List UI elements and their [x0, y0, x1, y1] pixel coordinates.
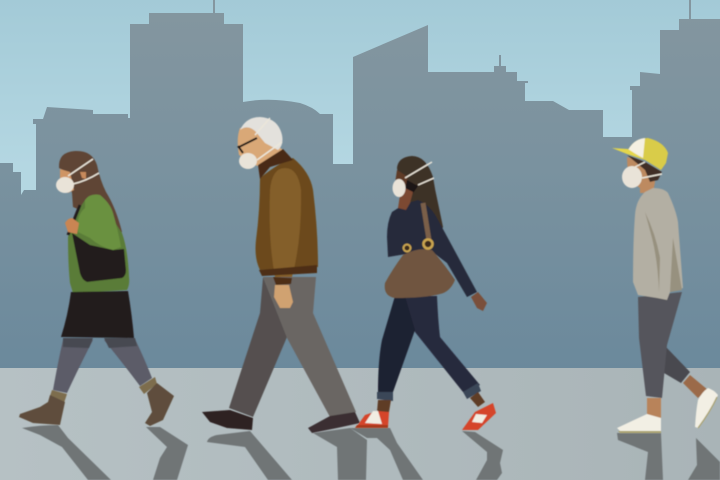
- cuffs: [377, 392, 393, 401]
- person 1: woman in green jacket: [19, 151, 174, 426]
- back leg: [229, 277, 287, 417]
- phone: [405, 180, 418, 196]
- hair: [627, 155, 662, 182]
- shadows on pavement: [22, 425, 720, 480]
- front leg: [647, 398, 661, 418]
- collar: [258, 149, 293, 179]
- mask: [392, 179, 406, 197]
- sweater: [633, 188, 683, 300]
- back leg: [378, 296, 415, 392]
- raised hand: [398, 188, 413, 210]
- ankles: [377, 400, 391, 412]
- hand: [65, 218, 79, 234]
- neck and face: [627, 157, 655, 193]
- sleeve: [78, 195, 121, 250]
- face: [60, 169, 74, 193]
- front shoe: [617, 414, 661, 431]
- front leg: [263, 277, 356, 417]
- bag: [72, 233, 126, 282]
- hair and headscarf: [59, 151, 122, 245]
- handbag: [385, 249, 455, 298]
- back leg: [683, 375, 708, 398]
- hem and cuff: [259, 265, 317, 276]
- face: [394, 170, 408, 198]
- front leg: [397, 296, 480, 392]
- green jacket: [68, 200, 129, 293]
- mask: [622, 166, 642, 188]
- white hair: [240, 117, 282, 150]
- hand: [471, 292, 487, 311]
- glasses: [238, 138, 257, 153]
- boots: [49, 390, 67, 403]
- city skyline: [0, 0, 720, 370]
- legs: [53, 340, 93, 393]
- person 2: older man in brown jacket: [202, 117, 360, 433]
- hand: [274, 285, 293, 308]
- hair: [397, 156, 443, 250]
- back arm and top: [387, 200, 477, 297]
- sky: [0, 0, 720, 370]
- mask: [56, 177, 74, 193]
- back shoe: [695, 388, 718, 428]
- shoes: [202, 410, 253, 430]
- skirt: [61, 291, 134, 338]
- shoes: [357, 411, 389, 427]
- person 4: man in yellow cap: [612, 138, 718, 433]
- sleeve: [270, 168, 301, 277]
- yellow cap: [628, 138, 668, 170]
- pavement: [0, 368, 720, 480]
- face and neck: [238, 127, 283, 166]
- person 3: woman on the phone with handbag: [355, 156, 496, 430]
- jacket body: [256, 158, 318, 270]
- mask: [239, 153, 257, 169]
